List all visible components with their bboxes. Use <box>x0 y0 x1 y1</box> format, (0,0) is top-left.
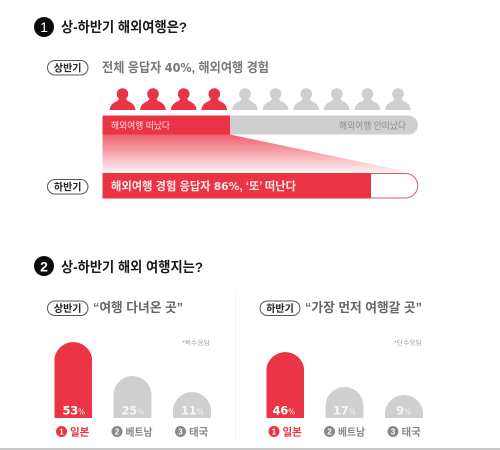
heading 1 <box>34 17 187 37</box>
first half subheading: “여행 다녀온 곳” <box>93 300 183 315</box>
bar: Japan 53% <box>54 342 92 418</box>
first half pill <box>48 301 88 316</box>
bar: Japan 53%: 53% <box>62 404 85 418</box>
first half summary text: 전체 응답자 40%, 해외여행 경험 <box>102 60 269 75</box>
bar: Thailand 9%: 9% <box>396 404 411 418</box>
label: Vietnam: 베트남 <box>338 426 365 438</box>
label: Vietnam <box>112 426 153 438</box>
second half label pill: 하반기 <box>54 180 82 194</box>
bar: Vietnam 25% <box>114 376 152 418</box>
people pictogram: 4 of 10 travelled <box>110 88 411 110</box>
second half subheading: “가장 먼저 여행갈 곳” <box>305 300 422 315</box>
bar: Vietnam 17%: 17% <box>333 404 356 418</box>
bar: Thailand 11%: 11% <box>181 404 204 418</box>
bar: Vietnam 25%: 25% <box>122 404 144 418</box>
heading 2: 상-하반기 해외 여행지는? <box>61 259 203 275</box>
label: Thailand: 3 <box>391 428 396 436</box>
gradient funnel connector <box>102 134 418 174</box>
label: Thailand <box>388 426 421 438</box>
panel: second half destinations <box>260 300 423 438</box>
label: Japan: 1 <box>272 428 277 436</box>
bar: Japan 46%: 46% <box>272 404 295 418</box>
bar: Japan 46% <box>266 352 304 418</box>
first half label pill: 상반기 <box>54 62 82 74</box>
label: Thailand: 3 <box>178 428 183 436</box>
second half proportion bar: 해외여행 경험 응답자 86%, ‘또’ 떠난다 <box>111 179 296 193</box>
single response note: *단수응답 <box>394 339 423 347</box>
first half proportion bar: 해외여행 떠났다 <box>111 120 170 132</box>
heading 2 <box>34 256 203 276</box>
second half pill: 하반기 <box>266 302 294 315</box>
multiple response note: *복수응답 <box>182 340 211 347</box>
bar: Thailand 11% <box>173 392 211 418</box>
label: Vietnam: 베트남 <box>126 426 153 438</box>
first half proportion bar: 해외여행 안떠났다 <box>339 120 406 132</box>
second half proportion bar <box>102 173 418 198</box>
label: Japan: 일본 <box>70 426 90 438</box>
label: Japan: 1 <box>59 428 64 436</box>
first half pill: 상반기 <box>54 302 82 315</box>
bar: Thailand 9% <box>385 395 423 418</box>
center divider <box>234 294 236 440</box>
label: Thailand: 태국 <box>189 426 209 438</box>
heading 1: 1 <box>40 19 48 35</box>
first half proportion bar <box>102 116 418 134</box>
label: Japan <box>268 426 302 438</box>
label: Vietnam: 2 <box>327 428 332 436</box>
label: Vietnam: 2 <box>115 428 120 436</box>
second half label pill <box>48 180 88 194</box>
heading 2: 2 <box>40 258 48 274</box>
second half pill <box>260 301 300 316</box>
first half label pill <box>48 60 88 75</box>
label: Thailand: 태국 <box>402 426 421 438</box>
label: Japan: 일본 <box>282 426 302 438</box>
bar: Vietnam 17% <box>326 387 364 418</box>
label: Vietnam <box>324 426 365 438</box>
label: Japan <box>56 426 90 438</box>
label: Thailand <box>175 426 209 438</box>
panel: first half destinations <box>48 300 211 438</box>
heading 1: 상-하반기 해외여행은? <box>61 19 187 35</box>
